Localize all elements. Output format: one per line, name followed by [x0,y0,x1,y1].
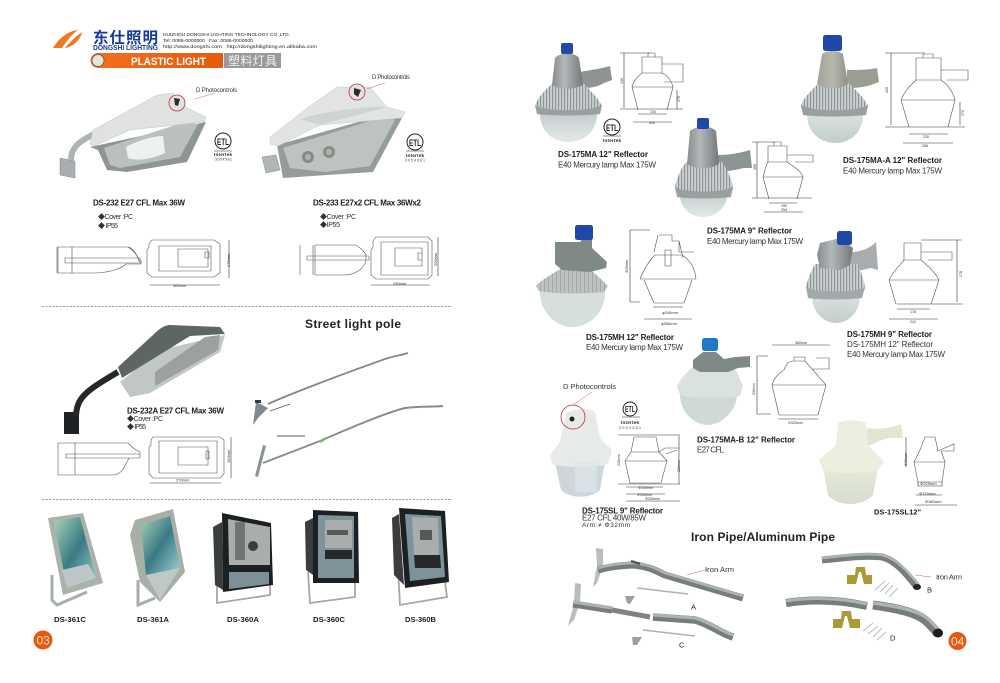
product label: DS-175MH 9: DS-175MH 9" Reflector [847,330,932,339]
product specs: DS-232: ◆Cover :PC [98,213,133,221]
product label: DS-175SL 9 [582,506,663,529]
floodlight: DS-360A [213,513,273,603]
dimension drawing: DS-175MH 9 [889,240,963,324]
icon: ETL Intertek mark MA: ETL [606,123,618,133]
icon: ETL Intertek mark second lamp: 3054581 [405,158,425,162]
product label: DS-175MH 12: E40 Mercury lamp Max 175W [586,343,683,352]
dimension drawing: DS-232A side [58,443,140,475]
company contact lines [163,32,317,49]
product label: DS-232A: DS-232A E27 CFL Max 36W [127,406,224,416]
product label: DS-175MA-B 12 [697,436,795,454]
product: DS-175MA 9 lamp photo [675,118,752,217]
street pole A [253,353,408,425]
dimension drawing: DS-232 top: 360mm [173,283,187,288]
heading: iron pipe / aluminum pipe: Iron Pipe/Aluminum Pipe [691,530,835,544]
product specs: DS-232 [98,213,133,230]
callout: D Photocontrols SL: D Photocontrols [563,382,616,391]
icon: ETL Intertek mark SL [619,402,641,430]
label: A: A [691,602,696,612]
grey banner tab [224,53,281,68]
product label: DS-175MH 9: E40 Mercury lamp Max 175W [847,350,945,359]
dimension drawing: DS-175MA 9: 360 [753,164,757,170]
label: C: C [679,640,685,650]
dimension drawing: DS-232A top: 270mm [176,478,190,482]
floodlight: DS-361C [48,513,103,605]
banner heading: PLASTIC LIGHT [131,56,206,68]
dimension drawing: DS-175SL12: Φ225mm [920,481,937,486]
dimension drawing: DS-175MH 12 [624,230,696,326]
product specs: DS-233: ◆IP55 [320,221,340,229]
dimension drawing: DS-175MA-A 12: 305 [922,144,928,148]
callout: D Photocontrols [195,88,237,99]
icon: ETL Intertek mark second lamp: ETL [409,138,421,148]
label: DS-360A: DS-360A [227,615,260,624]
product label: DS-175MA 9: DS-175MA 9" Reflector [707,226,792,236]
dimension drawing: DS-175MA-A 12 [885,53,968,148]
product: DS-232A lamp photo [64,325,225,434]
product label: DS-175SL 9: E27 CFL 40W/85W [582,514,646,522]
dimension drawing: DS-233 top: 290mm [393,281,407,286]
street pole B [255,406,443,477]
product: DS-175MA 12 lamp photo [535,43,612,142]
icon: ETL Intertek mark second lamp: Intertek [406,153,424,158]
page number 03: 03 [36,634,50,648]
icon: ETL Intertek mark SL: Intertek [621,420,639,425]
dimension drawing: DS-175MA 12 [620,53,683,125]
pipe B assembly [822,554,921,597]
product: DS-233 lamp photo [262,84,405,178]
product label: DS-175SL 9: Arm:≠ Φ32mm [582,522,630,529]
icon: ETL Intertek mark MA: Intertek [603,138,621,143]
dimension drawing: DS-175MA-A 12: 420 [885,87,889,93]
dimension drawing: DS-175SL12: Φ380mm [925,499,942,504]
company contact lines: http://www.dongshi.com http://dongshilighting.en.alibaba.com [163,44,317,49]
dimension drawing: DS-232A top: 150mm [226,449,231,463]
product label: DS-175MA 12 [558,150,656,170]
label: iron arm left: Iron Arm [705,565,734,574]
section banner: plastic light [91,53,281,68]
dimension drawing: DS-175MA 12: 430 [620,78,624,84]
dimension drawing: DS-232 top: 175mm [226,253,231,267]
dimension drawing: DS-175SL 9: 220mm [617,454,621,466]
dimension drawing: DS-175MH 9: 278 [959,271,963,277]
arrow: pole A [270,404,290,411]
dimension drawing: DS-175MA-B 12: 330mm [752,383,756,395]
product specs: DS-232A: ◆Cover :PC [127,415,163,423]
icon: round bulb [92,54,104,66]
label: DS-361A: DS-361A [137,615,170,624]
label: B: B [927,586,932,594]
heading: street light pole: Street light pole [305,317,401,331]
product label: DS-175MA 12: E40 Mercury lamp Max 175W [558,160,656,170]
label: DS-360C: DS-360C [313,615,346,624]
icon: ETL Intertek mark [214,133,232,162]
dimension drawing: DS-175MA-A 12: 230 [923,135,929,139]
dimension drawing: DS-175MA-B 12: Φ325mm [788,421,803,425]
page number 04 [948,632,966,650]
dimension drawing: DS-175MA-B 12 [752,341,830,425]
floodlight: DS-360B [392,508,449,605]
dimension drawing: DS-233 top [371,237,438,286]
dimension drawing: DS-175MA 9: 190 [781,204,787,208]
icon: ETL Intertek mark second lamp [405,134,425,162]
icon: ETL Intertek mark: 3054581 [215,158,232,162]
icon: ETL Intertek mark: ETL [217,137,229,147]
product label: DS-175MA-B 12: DS-175MA-B 12" Reflector [697,436,795,444]
dimension drawing: DS-175MA 12: 305 [649,121,655,125]
icon: orange swoosh logo [53,30,82,48]
callout: D Photocontrols SL [563,382,616,405]
product label: DS-175SL 9: DS-175SL 9" Reflector [582,506,663,516]
dimension drawing: DS-175SL12: Φ315mm [919,491,936,496]
product: DS-232 lamp photo [60,93,206,178]
product label: DS-175MA-A 12: DS-175MA-A 12" Reflector [843,156,942,165]
label: D: D [890,634,896,642]
icon: ETL Intertek mark MA [603,119,621,143]
arrow: pole B [277,435,305,437]
product label: DS-175MA-A 12 [843,156,942,176]
label: iron arm right: Iron Arm [936,572,962,582]
dimension drawing: DS-175SL 9: 320mm [677,460,681,472]
dimension drawing: DS-175MH 12: 305mm [624,259,629,273]
dimension drawing: DS-175MH 12: φ240mm [662,310,679,315]
product specs: DS-232A: ◆ IP55 [127,423,146,431]
dimension drawing: DS-232 side [57,247,141,273]
Chinese banner heading: 塑料灯具 [228,53,277,68]
product label: DS-233: DS-233 E27x2 CFL Max 36Wx2 [313,198,422,208]
product: DS-175MH 9 lamp photo [806,231,878,323]
dimension drawing: DS-232 top [147,240,231,288]
product: DS-175MA-B 12 lamp photo [677,338,750,425]
dimension drawing: DS-175SL12 [903,437,957,505]
product: DS-175SL12 lamp photo [819,420,903,504]
icon: ETL Intertek mark: Intertek [214,152,232,157]
page number 04: 04 [951,634,965,648]
product specs: DS-233: ◆Cover :PC [320,213,356,221]
product label: DS-175MA 9: E40 Mercury lamp Max 175W [707,237,803,246]
label: iron arm right [915,572,962,582]
dimension drawing: DS-175SL 9: Φ335mm [645,497,660,501]
dimension drawing: DS-175MA 12: 230 [650,110,656,114]
dimension drawing: DS-175SL 9 [617,435,681,501]
icon: ETL Intertek mark SL: ETL [625,405,635,414]
floodlight: DS-360C [305,510,359,603]
company name in English: DONGSHI LIGHTING [93,43,158,52]
product label: DS-175MH 9 [847,330,945,359]
product specs: DS-232: ◆ IP55 [98,222,118,230]
floodlight: DS-361A [130,509,185,605]
dimension drawing: DS-175MA-B 12: 360mm [795,341,807,345]
dimension drawing: DS-232A top [149,437,231,483]
dimension drawing: DS-175SL12: 325mm [903,452,908,466]
product label: DS-175MH 12: DS-175MH 12" Reflector [586,333,674,342]
pipe C assembly [568,583,733,645]
company name in Chinese: 东仕照明 [93,28,158,47]
product label: DS-175MH 9: DS-175MH 12" Reflector [847,340,933,349]
dimension drawing: DS-175SL 9: Φ335mm [637,493,652,497]
dimension drawing: DS-175MA 9 [752,142,813,212]
dimension drawing: DS-175MA 12: 170 [677,96,681,102]
dimension drawing: DS-175MA-A 12: 170 [961,110,965,116]
product label: DS-175MA 12: DS-175MA 12" Reflector [558,150,648,159]
callout: D Photocontrols second lamp [367,75,410,89]
dimension drawing: DS-175SL 9: Φ230mm [638,486,653,490]
dimension drawing: DS-175MH 12: φ305mm [661,321,678,326]
product: DS-175SL 9 lamp photo [550,405,612,497]
orange banner bar [91,53,223,68]
dimension drawing: DS-175MH 9: 178 [910,310,916,314]
pipe A assembly [593,548,743,604]
label: DS-361C: DS-361C [54,615,87,624]
dimension drawing: DS-175MH 9: 242 [910,320,916,324]
product label: DS-175MA-B 12: E27 CFL [697,446,725,454]
header: company logo and contact [53,28,317,52]
label: DS-360B: DS-360B [405,615,437,624]
product label: DS-232: DS-232 E27 CFL Max 36W [93,198,185,208]
company contact lines: Tel: 0086-0000000 Fax: 0086-0000000 [163,38,253,43]
divider 1 [42,306,452,308]
dimension drawing: DS-233 top: 200mm [433,252,438,266]
pipe D assembly [786,599,943,640]
product label: DS-175MH 12 [586,333,683,352]
dimension drawing: DS-175MA 9: 254 [781,208,787,212]
icon: ETL Intertek mark SL: 3054581 [619,426,641,430]
product label: DS-175SL12: DS-175SL12" [874,508,921,516]
product label: DS-175MA 9 [707,226,803,246]
product: DS-175MH 12 lamp photo [536,225,608,327]
callout: D Photocontrols second lamp: D Photocontrols [372,75,410,81]
divider 2 [42,498,452,500]
product specs: DS-232A [127,415,163,431]
product specs: DS-233 [320,213,356,229]
product: DS-175MA-A 12 lamp photo [801,35,879,143]
callout: D Photocontrols: D Photocontrols [196,88,237,94]
product label: DS-175MA-A 12: E40 Mercury lamp Max 175W [843,166,942,176]
page number 03 [34,630,52,650]
dimension drawing: DS-233 side [300,245,369,275]
company contact lines: HUIZHOU DONGSHI LIGHTING TECHNOLOGY CO.,LTD. [163,32,290,37]
label: iron arm left [687,565,734,575]
